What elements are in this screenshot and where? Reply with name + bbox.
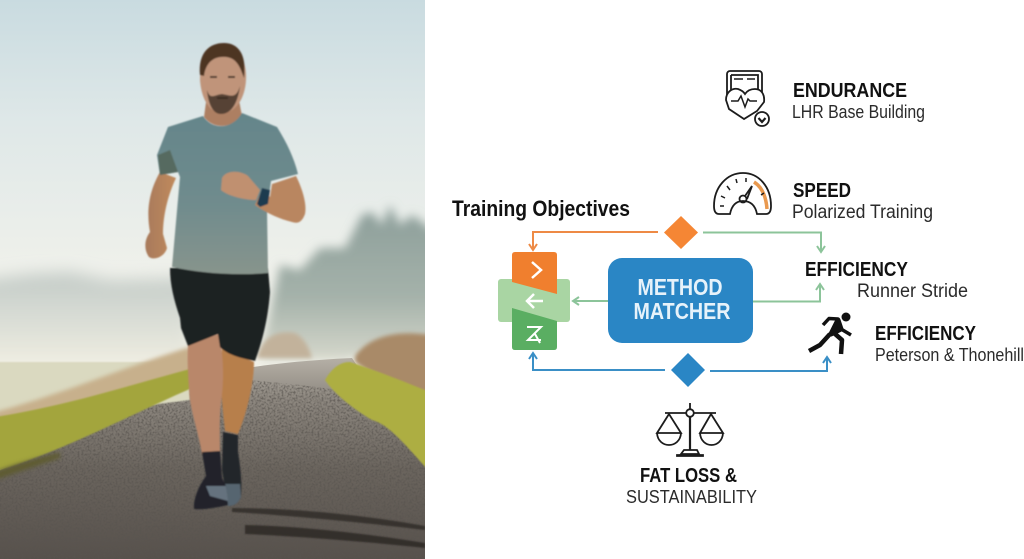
photo sky [0, 0, 425, 367]
flow arrow: matcher to efficiency [753, 284, 824, 302]
label: endurance: ENDURANCE [793, 80, 907, 102]
heading: Training Objectives: Training Objectives [452, 196, 630, 221]
diamond: blue [671, 353, 705, 387]
runner figure [145, 43, 306, 509]
chevron glyph [532, 262, 541, 278]
runner far shoe and sock [222, 432, 241, 506]
label: efficiency peterson and thonehill: EFFICIENCY [875, 323, 977, 345]
photo: runner on a gravel road at sunrise [0, 0, 440, 559]
label: efficiency peterson and thonehill [875, 323, 1024, 365]
method matcher box: METHOD [638, 274, 722, 300]
flow arrow: green to speed [703, 232, 825, 252]
dark green block [512, 308, 557, 350]
runner shorts [170, 268, 270, 361]
method matcher box: MATCHER [634, 298, 731, 324]
photo gravel road [0, 358, 425, 559]
label: speed: SPEED [793, 180, 851, 202]
runner watch [257, 188, 270, 207]
label: speed [792, 180, 933, 223]
light green band [498, 279, 570, 322]
orange block [512, 252, 557, 294]
flow arrow: blue to objectives [529, 353, 665, 370]
left arrow glyph [527, 294, 543, 308]
label: efficiency runner stride [805, 259, 968, 302]
runner beard [207, 86, 240, 114]
runner hand [221, 172, 260, 200]
runner near shoe and sock [194, 451, 228, 509]
icon: heart monitor [726, 71, 769, 126]
runner near leg [188, 334, 223, 454]
runner right arm [255, 176, 306, 223]
icon: speedometer [714, 173, 771, 214]
runner neck [203, 102, 242, 127]
label: fat loss and sustainability: FAT LOSS & [640, 465, 737, 487]
z arrows glyph [527, 327, 541, 343]
label: speed: Polarized Training [792, 202, 933, 223]
label: endurance: LHR Base Building [792, 102, 925, 122]
label: efficiency runner stride: EFFICIENCY [805, 259, 909, 281]
label: endurance [792, 80, 925, 122]
diamond: orange [664, 216, 698, 249]
runner shirt [157, 113, 298, 274]
photo field and grass [0, 333, 430, 480]
runner hair [200, 43, 245, 78]
icon: running person [809, 312, 851, 354]
method matcher box [608, 258, 753, 343]
label: fat loss and sustainability [626, 465, 757, 507]
label: efficiency runner stride: Runner Stride [857, 281, 968, 302]
photo distant hazy treeline [0, 205, 440, 362]
runner head [199, 56, 247, 110]
runner far leg [221, 348, 254, 434]
icon: balance scales [657, 403, 723, 456]
runner sleeve shadow [158, 150, 178, 175]
flow arrow: matcher to objectives [573, 297, 608, 305]
flow arrow: blue to runner [710, 357, 831, 371]
flow arrow: orange to objectives [529, 232, 658, 250]
label: fat loss and sustainability: SUSTAINABILITY [626, 487, 757, 507]
runner left arm [145, 172, 176, 258]
objectives stacked icon [498, 252, 570, 350]
runner eyes and mouth [210, 77, 235, 98]
